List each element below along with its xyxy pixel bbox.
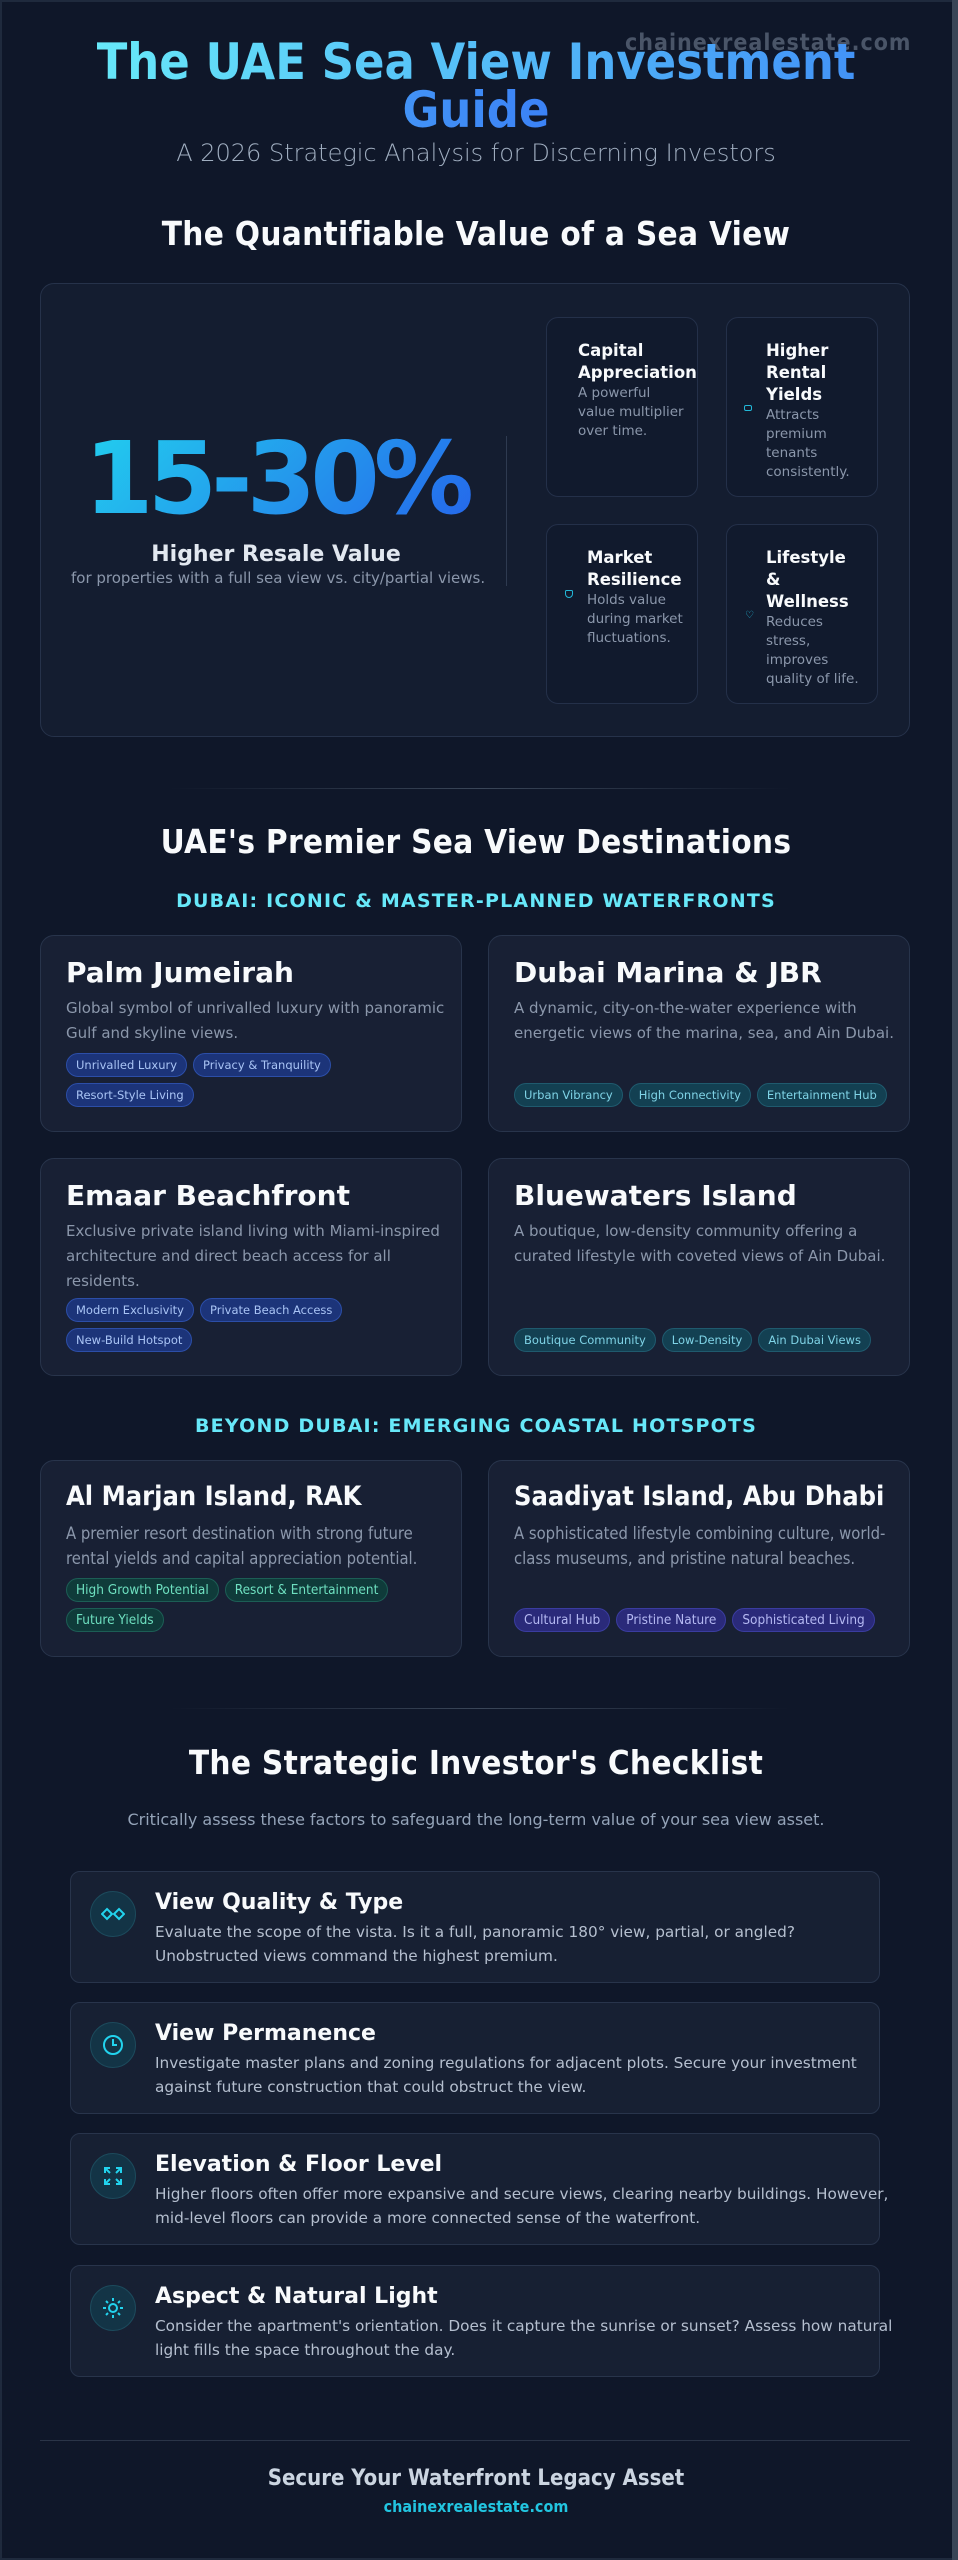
card: saadiyat: Saadiyat Island, Abu Dhabi <box>514 1481 884 1512</box>
checklist: view quality: Evaluate the scope of the vista. Is it a full, panoramic 180° view, partial, or angled? Unobstructed views command the highest premium. <box>155 1923 795 1965</box>
card: saadiyat: A sophisticated lifestyle combining culture, world-class museums, and pristine natural beaches. <box>514 1524 885 1568</box>
card: al marjan: A premier resort destination with strong future rental yields and capital appreciation potential. <box>66 1524 417 1568</box>
card: al marjan: Future Yields <box>76 1612 154 1628</box>
panel: value stats <box>40 283 910 737</box>
card: emaar beachfront: Modern Exclusivity <box>76 1303 184 1317</box>
card: lifestyle: ♡ <box>745 610 754 621</box>
card: palm jumeirah: Privacy & Tranquility <box>203 1058 321 1072</box>
big stat: for properties with a full sea view vs. city/partial views. <box>71 569 485 587</box>
checklist: permanence <box>70 2002 880 2114</box>
card: lifestyle <box>726 524 878 704</box>
card: capital appreciation: Capital Appreciation <box>578 341 697 382</box>
checklist: elevation: Elevation & Floor Level <box>155 2152 442 2177</box>
big stat: 15-30% <box>84 420 468 537</box>
checklist: aspect: Aspect & Natural Light <box>155 2284 438 2309</box>
card: bluewaters: A boutique, low-density community offering a curated lifestyle with coveted views of Ain Dubai. <box>514 1222 885 1265</box>
card: lifestyle: Lifestyle & Wellness <box>766 548 849 611</box>
big stat <box>71 420 485 587</box>
card: saadiyat: Sophisticated Living <box>742 1612 865 1628</box>
card: bluewaters: Ain Dubai Views <box>768 1333 861 1347</box>
card: al marjan: Resort & Entertainment <box>235 1582 378 1598</box>
card: saadiyat <box>488 1460 910 1657</box>
card: al marjan: High Growth Potential <box>76 1582 209 1598</box>
card: bluewaters: Boutique Community <box>524 1333 646 1347</box>
card: al marjan: Al Marjan Island, RAK <box>66 1481 361 1512</box>
card: emaar beachfront <box>40 1158 462 1376</box>
card: dubai marina <box>488 935 910 1132</box>
icon: sun <box>90 2285 136 2331</box>
title: The UAE Sea View Investment <box>97 33 855 91</box>
footer: Secure Your Waterfront Legacy Asset <box>268 2466 684 2491</box>
big stat: Higher Resale Value <box>151 542 401 567</box>
card: emaar beachfront: Private Beach Access <box>210 1303 332 1317</box>
card: dubai marina: Entertainment Hub <box>767 1088 877 1102</box>
title: Guide <box>402 81 550 139</box>
card: market resilience: Holds value during market fluctuations. <box>587 592 683 646</box>
card: emaar beachfront: Exclusive private island living with Miami-inspired architecture and direct beach access for all residents. <box>66 1222 440 1290</box>
checklist: permanence: Investigate master plans and zoning regulations for adjacent plots. Secure your investment against future construction that could obstruct the view. <box>155 2054 857 2096</box>
checklist: permanence: View Permanence <box>155 2021 376 2046</box>
card: dubai marina: A dynamic, city-on-the-water experience with energetic views of the marina, sea, and Ain Dubai. <box>514 999 894 1042</box>
card: market resilience <box>546 524 698 704</box>
card: palm jumeirah <box>40 935 462 1132</box>
subtitle: A 2026 Strategic Analysis for Discerning Investors <box>176 139 776 167</box>
card: dubai marina: High Connectivity <box>639 1088 741 1102</box>
card: bluewaters <box>488 1158 910 1376</box>
heading: checklist: The Strategic Investor's Checklist <box>189 1743 763 1782</box>
checklist: aspect: Consider the apartment's orientation. Does it capture the sunrise or sunset? Assess how natural light fills the space throughout the day. <box>155 2317 892 2359</box>
checklist: aspect <box>70 2265 880 2377</box>
icon: clock <box>90 2022 136 2068</box>
card: saadiyat: Cultural Hub <box>524 1612 600 1628</box>
card: higher rental yields <box>726 317 878 497</box>
footer: chainexrealestate.com <box>384 2497 568 2516</box>
card: palm jumeirah: Resort-Style Living <box>76 1088 184 1102</box>
card: capital appreciation: A powerful value multiplier over time. <box>578 385 684 439</box>
card: palm jumeirah: Global symbol of unrivalled luxury with panoramic Gulf and skyline views. <box>66 999 444 1042</box>
card: higher rental yields: Attracts premium tenants consistently. <box>766 407 850 480</box>
card: al marjan <box>40 1460 462 1657</box>
card: palm jumeirah: Palm Jumeirah <box>66 956 294 989</box>
card: dubai marina: Dubai Marina & JBR <box>514 956 822 989</box>
card: palm jumeirah: Unrivalled Luxury <box>76 1058 177 1072</box>
card: bluewaters: Low-Density <box>672 1333 742 1347</box>
card: higher rental yields: Higher Rental Yields <box>766 341 828 404</box>
footer <box>268 2466 684 2516</box>
icon: expand <box>90 2153 136 2199</box>
card: saadiyat: Pristine Nature <box>626 1612 716 1628</box>
card: lifestyle: Reduces stress, improves quality of life. <box>766 614 859 687</box>
card: bluewaters: Bluewaters Island <box>514 1179 797 1212</box>
checklist: view quality <box>70 1871 880 1983</box>
checklist: elevation: Higher floors often offer more expansive and secure views, clearing nearby buildings. However, mid-level floors can provide a more connected sense of the waterfront. <box>155 2185 888 2227</box>
heading: quantifiable value: The Quantifiable Value of a Sea View <box>162 214 790 253</box>
card: emaar beachfront: New-Build Hotspot <box>76 1333 182 1347</box>
icon: diamonds <box>90 1891 136 1937</box>
checklist intro: Critically assess these factors to safeguard the long-term value of your sea view asset. <box>127 1810 825 1829</box>
title <box>97 33 855 139</box>
checklist: view quality: View Quality & Type <box>155 1890 403 1915</box>
subheading: beyond dubai: BEYOND DUBAI: EMERGING COASTAL HOTSPOTS <box>195 1415 757 1437</box>
watermark: chainexrealestate.com <box>625 30 912 56</box>
card: market resilience: Market Resilience <box>587 548 682 589</box>
checklist: elevation <box>70 2133 880 2245</box>
card: capital appreciation <box>546 317 698 497</box>
heading: destinations: UAE's Premier Sea View Destinations <box>161 822 791 861</box>
card: emaar beachfront: Emaar Beachfront <box>66 1179 350 1212</box>
subheading: dubai: DUBAI: ICONIC & MASTER-PLANNED WATERFRONTS <box>176 890 776 912</box>
card: dubai marina: Urban Vibrancy <box>524 1088 613 1102</box>
